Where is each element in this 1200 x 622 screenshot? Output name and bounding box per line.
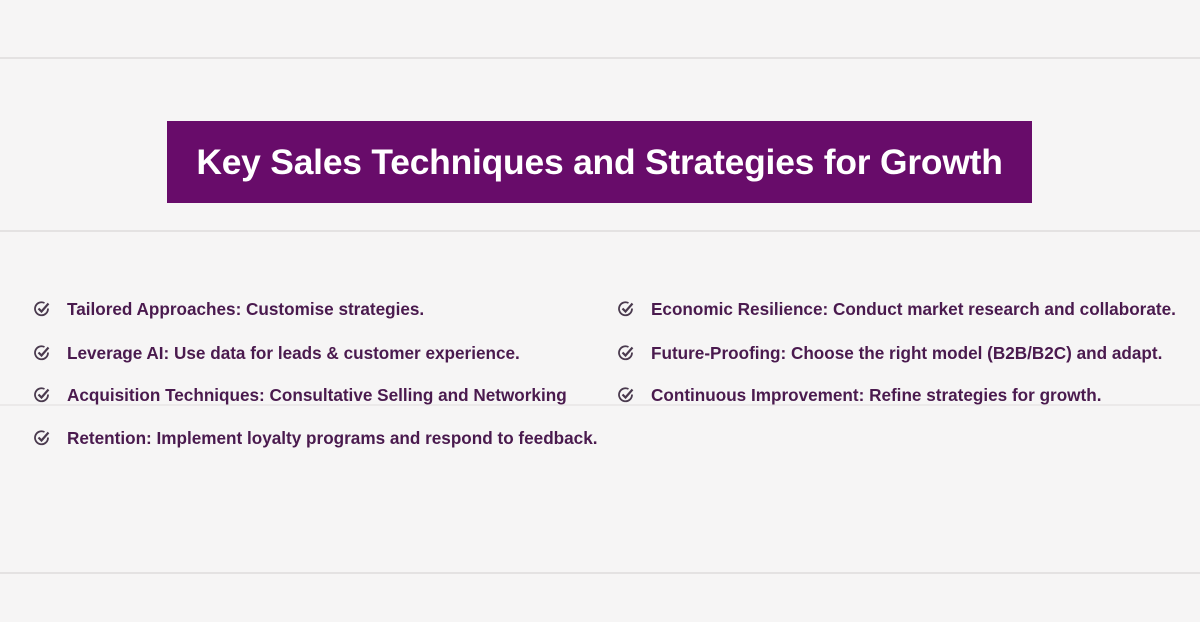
title [167,121,1032,203]
item: economic resilience: Economic Resilience: Conduct market research and collaborate. [651,298,1176,318]
item: continuous improvement: Continuous Improvement: Refine strategies for growth. [651,384,1101,404]
list: right column [618,298,1176,404]
item: retention: Retention: Implement loyalty programs and respond to feedback. [67,428,598,448]
item: leverage AI: Leverage AI: Use data for leads & customer experience. [67,342,520,362]
item: tailored approaches: Tailored Approaches: Customise strategies. [67,298,424,318]
list: left column [34,298,598,448]
title: Key Sales Techniques and Strategies for Growth [196,142,1003,182]
item: future-proofing: Future-Proofing: Choose the right model (B2B/B2C) and adapt. [651,342,1162,362]
item: acquisition: Acquisition Techniques: Consultative Selling and Networking [67,384,567,404]
